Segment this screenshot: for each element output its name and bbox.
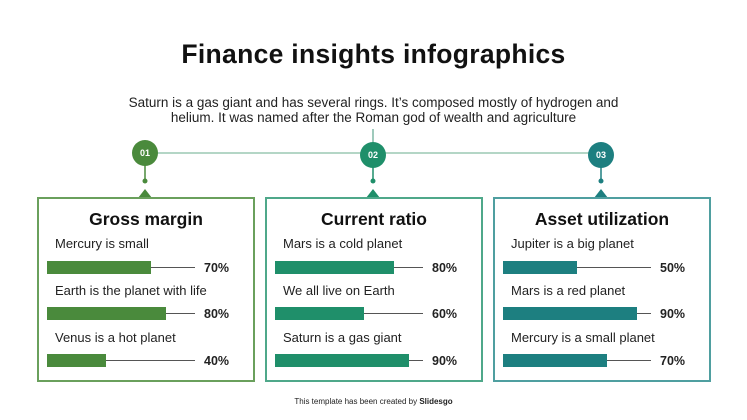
marker 02: 02 (368, 150, 378, 160)
panel: asset utilization (493, 197, 711, 382)
marker 03: 03 (596, 150, 606, 160)
row 1: Mercury is small (55, 236, 149, 251)
marker 01: 01 (140, 148, 150, 158)
timeline connectors (138, 129, 608, 197)
row 2: Mars is a red planet (511, 283, 625, 298)
heading: Asset utilization (535, 209, 669, 229)
marker 02 (360, 142, 386, 168)
subtitle text: Saturn is a gas giant and has several rings. It’s composed mostly of hydrogen and (129, 95, 618, 110)
row 3: Venus is a hot planet (55, 330, 176, 345)
marker 03 (588, 142, 614, 168)
panel: current ratio: 90% (432, 354, 457, 368)
row 1: Jupiter is a big planet (511, 236, 634, 251)
panel: asset utilization: 50% (660, 261, 685, 275)
title: Finance insights infographics (181, 39, 566, 69)
panel: asset utilization: 70% (660, 354, 685, 368)
row 2: Earth is the planet with life (55, 283, 207, 298)
row 1: Mars is a cold planet (283, 236, 402, 251)
heading: Current ratio (321, 209, 427, 229)
row 3: Saturn is a gas giant (283, 330, 402, 345)
panel: gross margin: 40% (204, 354, 229, 368)
panel: current ratio: 80% (432, 261, 457, 275)
subtitle text: helium. It was named after the Roman god of wealth and agriculture (171, 110, 576, 125)
heading: Gross margin (89, 209, 203, 229)
panel: gross margin (37, 197, 255, 382)
row 3: Mercury is a small planet (511, 330, 655, 345)
row 2: We all live on Earth (283, 283, 395, 298)
panel: current ratio: 60% (432, 307, 457, 321)
footer credit: This template has been created by Slidesgo (294, 397, 453, 406)
panel: gross margin: 80% (204, 307, 229, 321)
panel: current ratio (265, 197, 483, 382)
marker 01 (132, 140, 158, 166)
panel: asset utilization: 90% (660, 307, 685, 321)
panel: gross margin: 70% (204, 261, 229, 275)
subtitle text (129, 95, 618, 125)
